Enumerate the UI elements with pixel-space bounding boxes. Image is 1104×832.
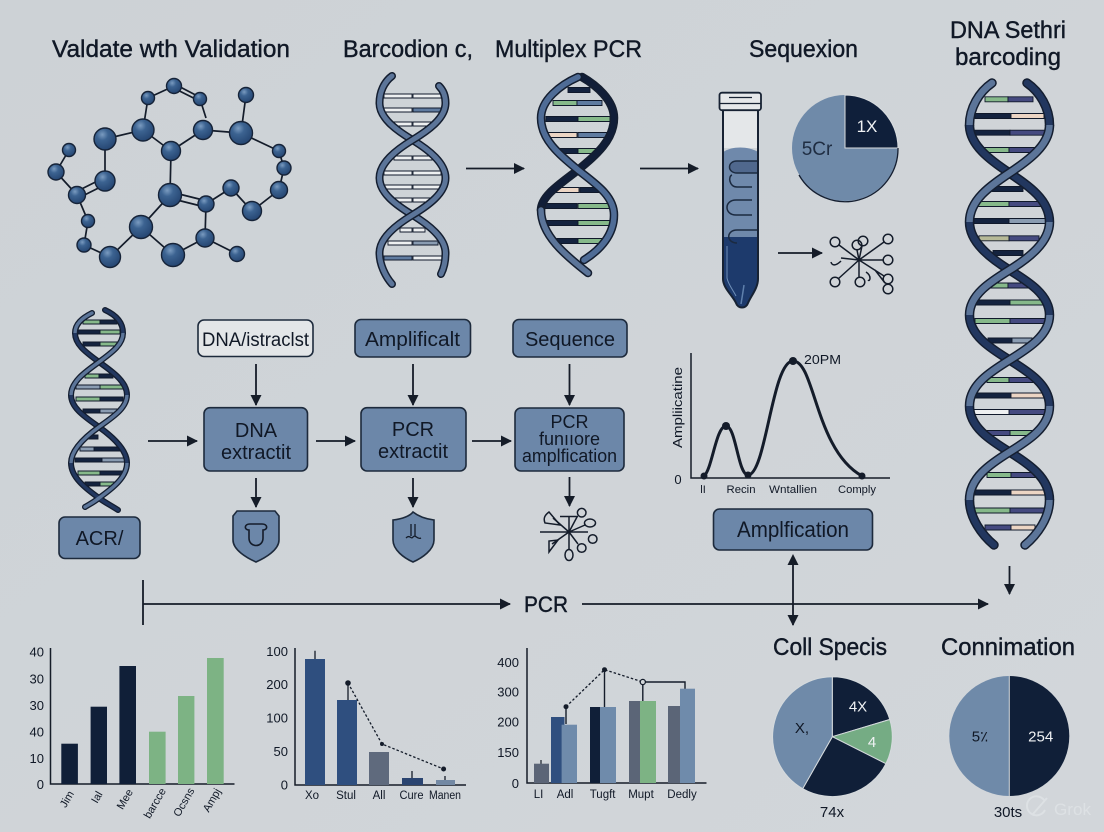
x axis labels: Mee: [115, 787, 136, 812]
DNA helix: multiplex PCR: [541, 77, 614, 273]
peak label: 20PM: [804, 353, 841, 367]
y axis labels: 50: [274, 744, 288, 759]
DNA helix: barcoding: [380, 76, 446, 284]
x axis labels: Xo: [305, 790, 319, 802]
arrow: down to PCR amplification: [568, 364, 570, 405]
pie chart: Contamination: [949, 676, 1069, 821]
box: DNA extraction: extractit: [221, 442, 291, 464]
pie labels: 74x: [820, 804, 845, 821]
arrow: down to shield two: [412, 478, 414, 507]
watermark: Grok: Grok: [1054, 800, 1091, 819]
heading: Contamination: Connimation: [941, 634, 1075, 661]
arrow: helix to DNA extraction: [148, 440, 197, 442]
y axis labels: 10: [30, 751, 44, 766]
pie: sequencing share: [792, 95, 898, 202]
pie labels: [972, 728, 1053, 821]
box: Amplification: Amplfication: [737, 517, 849, 542]
y axis labels: 200: [497, 714, 519, 730]
y axis labels: 0: [281, 778, 288, 792]
line chart: amplification curve: [670, 353, 890, 496]
box: DNA extraction: DNA: [235, 420, 278, 442]
icon: test tube: [720, 93, 762, 313]
box: DNA istraclst: [198, 320, 313, 356]
y axis labels: 30: [30, 672, 44, 686]
axis labels: Comply: [838, 484, 876, 496]
heading: Coll Species: Coll Specis: [773, 634, 887, 661]
box: DNA istraclst: DNA/istraclst: [202, 330, 310, 351]
x axis labels: [534, 789, 697, 801]
box: PCR further amplification: funııore: [539, 429, 600, 449]
title: DNA barcoding: [950, 17, 1066, 71]
arrow: PCR to amplification: [472, 440, 511, 442]
box: PCR extraction: PCR: [392, 419, 434, 441]
pie labels: [795, 698, 876, 821]
pie label: 1X: 1X: [857, 117, 877, 136]
DNA helix: right tall: [970, 83, 1050, 545]
x axis labels: Manen: [429, 790, 461, 802]
arrow: down to network two: [568, 477, 570, 506]
axis labels: Wntallien: [769, 484, 817, 496]
pie chart: Coll Species: [773, 677, 892, 821]
x axis labels: [305, 790, 461, 802]
y axis labels: [266, 644, 288, 792]
DNA helix: left small: [71, 310, 127, 510]
title: DNA barcoding: DNA Sethri: [950, 17, 1066, 44]
box: PCR extraction: [361, 408, 466, 471]
flow line: left bracket to PCR: [143, 580, 510, 625]
box: Sequence: [513, 320, 627, 357]
title: DNA barcoding: barcoding: [955, 44, 1061, 71]
y axis labels: 400: [497, 655, 519, 670]
x axis labels: Ampj: [201, 787, 224, 814]
x axis labels: barcce: [142, 786, 169, 821]
y axis labels: 40: [30, 724, 44, 740]
y axis labels: 200: [266, 677, 288, 692]
x axis labels: Jim: [58, 789, 77, 810]
box: PCR further amplification: amplfication: [522, 446, 617, 466]
molecule network: [48, 78, 291, 268]
y axis labels: 0: [37, 777, 44, 792]
x axis labels: Ial: [89, 789, 106, 806]
bar chart: left: [30, 644, 234, 821]
title: Sequencing: Sequexion: [749, 36, 858, 63]
arrow: barcoding to multiplex: [466, 168, 524, 170]
pie labels: 254: [1028, 728, 1053, 746]
icon: branching network: [830, 234, 893, 294]
box: Amplificalt: Amplificalt: [365, 329, 460, 351]
y axis title: Ampliicatine: [670, 367, 685, 448]
pie labels: X,: [795, 720, 809, 737]
x axis labels: Ocsns: [171, 786, 198, 819]
x axis labels: All: [373, 790, 385, 802]
box: PCR further amplification: [515, 408, 624, 471]
y axis labels: 100: [266, 644, 288, 659]
title: Validate with Validation: Valdate wth Validation: [52, 36, 290, 63]
x axis labels: [58, 786, 224, 821]
y axis labels: 40: [30, 644, 44, 660]
x axis labels: Stul: [336, 790, 356, 802]
title: Multiplex PCR: Multiplex PCR: [495, 36, 642, 63]
icon: shield one: [233, 511, 279, 562]
arrow: down to shield: [255, 478, 257, 507]
pie labels: 4: [868, 734, 876, 751]
bar chart: right grouped: [497, 648, 706, 801]
x axis labels: Cure: [400, 790, 424, 802]
y axis labels: 300: [497, 684, 519, 700]
y axis labels: [497, 655, 519, 791]
icon: branching network two: [540, 508, 597, 560]
y axis labels: 150: [497, 745, 519, 760]
box: DNA extraction: [204, 408, 308, 471]
axis labels: 0: [674, 472, 682, 487]
box: PCR further amplification: PCR: [550, 412, 589, 432]
y axis labels: 100: [266, 710, 288, 726]
title: Barcoding: Barcodion c,: [343, 36, 473, 63]
flow line: PCR to right: [582, 603, 988, 605]
label: PCR: PCR: [524, 592, 568, 617]
arrow: down to DNA extraction: [255, 364, 257, 405]
double arrow: amplification to PCR line: [792, 556, 794, 625]
arrow: tube to network: [778, 252, 822, 254]
pie label: 5Cr: 5Cr: [802, 139, 833, 160]
y axis labels: 0: [512, 776, 519, 791]
arrow: helix down: [1008, 566, 1010, 594]
arrow: down to PCR extraction: [412, 364, 414, 405]
pie labels: 5٪: [972, 728, 988, 746]
axis labels: Recin: [726, 484, 756, 496]
axis labels: [674, 472, 876, 496]
x axis labels: Mupt: [628, 789, 655, 801]
pie labels: 30ts: [994, 804, 1022, 821]
axis labels: lI: [700, 484, 706, 496]
box: Amplificalt: [355, 320, 470, 357]
box: ACR: [59, 517, 140, 558]
arrow: multiplex to sequencing: [640, 168, 698, 170]
box: Sequence: Sequence: [525, 329, 615, 351]
arrow: DNA to PCR: [316, 440, 355, 442]
y axis labels: 30: [30, 698, 44, 713]
box: ACR: ACR/: [76, 528, 124, 550]
box: PCR extraction: extractit: [378, 441, 448, 463]
y axis labels: [30, 644, 44, 792]
x axis labels: Adl: [557, 789, 573, 801]
watermark: Grok: [1027, 796, 1091, 819]
pie labels: 4X: [849, 698, 867, 716]
x axis labels: Tugft: [590, 789, 616, 801]
box: Amplification: [714, 509, 872, 550]
x axis labels: Dedly: [667, 789, 697, 801]
icon: shield two: [393, 512, 434, 562]
bar chart: middle: [266, 644, 466, 802]
x axis labels: LI: [534, 789, 543, 801]
